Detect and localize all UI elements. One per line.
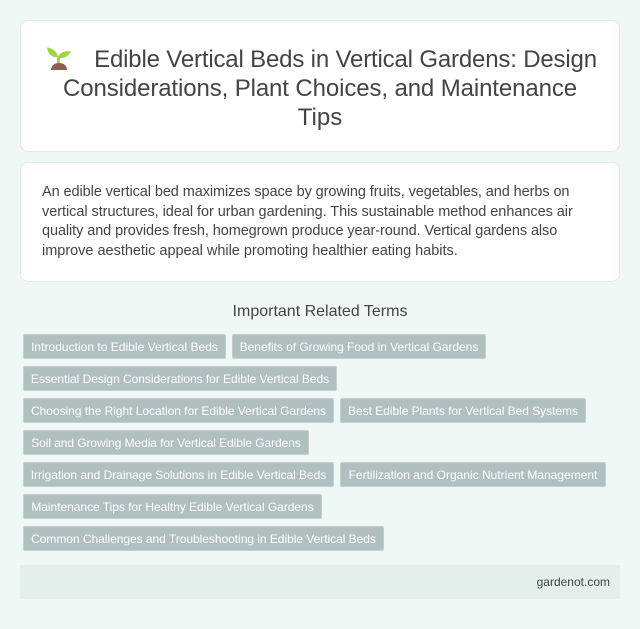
description text: An edible vertical bed maximizes space by growing fruits, vegetables, and herbs on [42, 184, 569, 200]
description text: improve aesthetic appeal while promoting healthier eating habits. [42, 242, 458, 258]
title [63, 46, 597, 131]
tag [23, 334, 226, 359]
tag: Soil and Growing Media for Vertical Edible Gardens [31, 436, 301, 450]
heading: related terms: Important Related Terms [233, 303, 407, 320]
tag: Choosing the Right Location for Edible Vertical Gardens [31, 404, 326, 418]
tag [23, 430, 309, 455]
tag [23, 526, 384, 551]
tag list [23, 334, 606, 551]
source text: gardenot.com [537, 575, 610, 589]
tag [23, 462, 334, 487]
tag: Fertilization and Organic Nutrient Management [349, 468, 597, 482]
tag: Maintenance Tips for Healthy Edible Vertical Gardens [31, 500, 314, 514]
tag [340, 462, 606, 487]
tag: Introduction to Edible Vertical Beds [31, 340, 218, 354]
tag: Essential Design Considerations for Edible Vertical Beds [31, 372, 329, 386]
tag [232, 334, 486, 359]
footer [20, 565, 620, 599]
icon: seedling [47, 48, 71, 70]
tag: Best Edible Plants for Vertical Bed Systems [348, 404, 578, 418]
panel: description [20, 162, 620, 282]
title: Tips [298, 104, 342, 131]
description text [42, 184, 573, 258]
tag [23, 366, 337, 391]
tag: Common Challenges and Troubleshooting in Edible Vertical Beds [31, 532, 376, 546]
tag [23, 398, 334, 423]
tag [23, 494, 322, 519]
tag: Benefits of Growing Food in Vertical Gardens [240, 340, 478, 354]
panel: title card [20, 20, 620, 152]
description text: vertical structures, ideal for urban gardening. This sustainable method enhances air [42, 204, 573, 220]
title: Edible Vertical Beds in Vertical Gardens: Design [94, 46, 597, 73]
tag [340, 398, 586, 423]
tag: Irrigation and Drainage Solutions in Edible Vertical Beds [31, 468, 326, 482]
description text: quality and provides fresh, homegrown produce year-round. Vertical gardens also [42, 223, 557, 239]
title: Considerations, Plant Choices, and Maintenance [63, 75, 577, 102]
